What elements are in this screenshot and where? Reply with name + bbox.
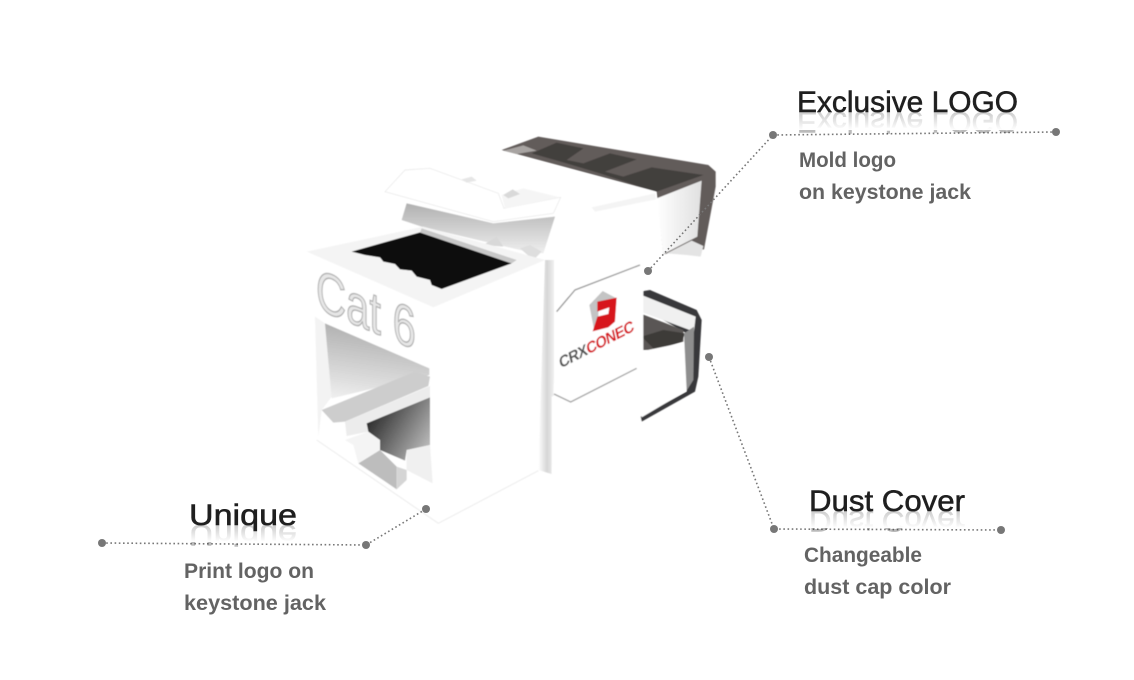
- heading with reflection: [802, 485, 972, 537]
- bottom dust cover: [640, 290, 702, 422]
- description: Changeable: [804, 544, 922, 567]
- description: [799, 149, 971, 204]
- description: Print logo on: [184, 560, 314, 583]
- heading with reflection: Unique: [189, 499, 297, 532]
- corner strip: [538, 260, 554, 474]
- description: on keystone jack: [799, 181, 971, 204]
- jack body upper housing: [437, 152, 663, 300]
- release latch: [385, 168, 561, 222]
- heading with reflection: Exclusive LOGO: [797, 105, 1018, 138]
- description: dust cap color: [804, 576, 951, 599]
- keystone jack product illustration: [307, 137, 716, 523]
- leader line: [644, 128, 1060, 275]
- side label panel: [553, 265, 643, 402]
- heading with reflection: Exclusive LOGO: [797, 86, 1018, 119]
- heading with reflection: [182, 499, 304, 551]
- description: keystone jack: [184, 592, 326, 615]
- CRXCONEC logo text: CRXCONEC: [558, 318, 636, 372]
- description: [804, 544, 951, 599]
- contact slot: [352, 228, 517, 289]
- heading with reflection: Dust Cover: [809, 504, 965, 537]
- heading with reflection: Unique: [189, 518, 297, 551]
- shadow under latch: [402, 203, 555, 253]
- heading with reflection: Dust Cover: [809, 485, 965, 518]
- front face: [307, 252, 543, 523]
- callout: Exclusive LOGO: [644, 86, 1060, 275]
- top face of jack: [307, 227, 545, 307]
- RJ45 opening: [315, 317, 433, 489]
- top dust cover: [502, 137, 716, 257]
- callout: Unique: [98, 499, 430, 615]
- Cat 6 moulded text: Cat 6: [316, 257, 416, 363]
- description: [184, 560, 326, 615]
- side face lower edge: [552, 353, 642, 473]
- heading with reflection: [790, 86, 1025, 138]
- CRXCONEC logo mark: [589, 291, 617, 331]
- callout: Dust Cover: [705, 353, 1005, 599]
- description: Mold logo: [799, 149, 896, 172]
- leader line: [98, 505, 430, 549]
- leader line: [705, 353, 1005, 534]
